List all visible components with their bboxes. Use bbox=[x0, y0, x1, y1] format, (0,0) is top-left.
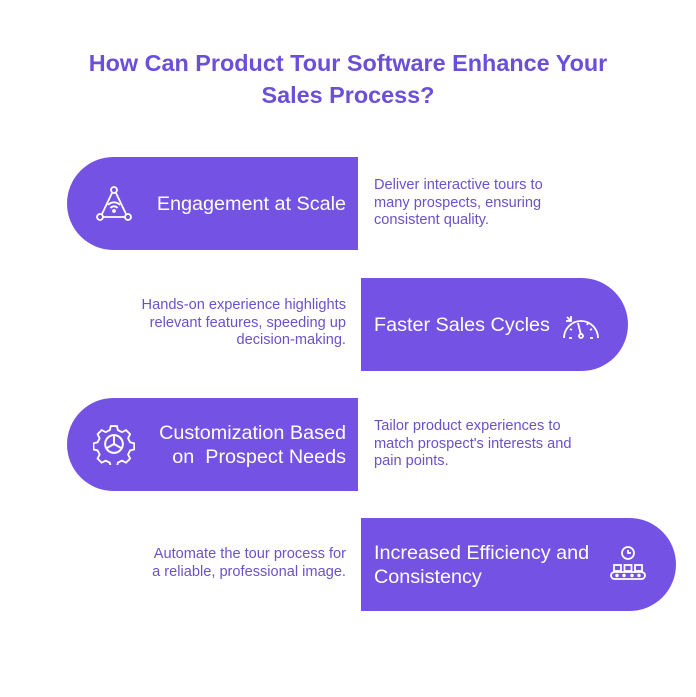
panel: customization bbox=[67, 398, 358, 491]
panel: customization: Customization Based bbox=[159, 422, 346, 444]
panel: efficiency: Increased Efficiency and bbox=[374, 542, 589, 564]
text: efficiency bbox=[152, 546, 346, 580]
icon: network bbox=[96, 186, 132, 221]
panel: engagement: Engagement at Scale bbox=[157, 192, 346, 214]
panel: efficiency bbox=[361, 518, 676, 611]
text: customization bbox=[374, 418, 571, 469]
panel: customization: on Prospect Needs bbox=[172, 446, 346, 468]
panel: faster: Faster Sales Cycles bbox=[374, 314, 550, 336]
text: customization: Tailor product experiences to bbox=[374, 418, 561, 434]
text: faster: Hands-on experience highlights bbox=[142, 297, 346, 313]
panel: faster bbox=[361, 278, 628, 371]
text: customization: pain points. bbox=[374, 453, 449, 469]
panel: efficiency: Consistency bbox=[374, 566, 482, 588]
text: efficiency: a reliable, professional image. bbox=[152, 564, 346, 580]
title bbox=[89, 50, 607, 108]
title: How Can Product Tour Software Enhance Your bbox=[89, 50, 607, 76]
text: faster bbox=[142, 297, 346, 348]
text: engagement: many prospects, ensuring bbox=[374, 194, 541, 210]
text: customization: match prospect's interests and bbox=[374, 436, 571, 452]
icon: conveyor clock bbox=[610, 546, 646, 580]
icon: gear bbox=[93, 425, 135, 465]
text: engagement bbox=[374, 177, 543, 228]
panel: engagement bbox=[67, 157, 358, 250]
text: engagement: Deliver interactive tours to bbox=[374, 177, 543, 193]
title: Sales Process? bbox=[262, 82, 434, 108]
text: faster: relevant features, speeding up bbox=[150, 314, 346, 330]
text: efficiency: Automate the tour process for bbox=[154, 546, 346, 562]
icon: gauge bbox=[563, 316, 599, 339]
text: engagement: consistent quality. bbox=[374, 212, 489, 228]
text: faster: decision-making. bbox=[236, 332, 346, 348]
